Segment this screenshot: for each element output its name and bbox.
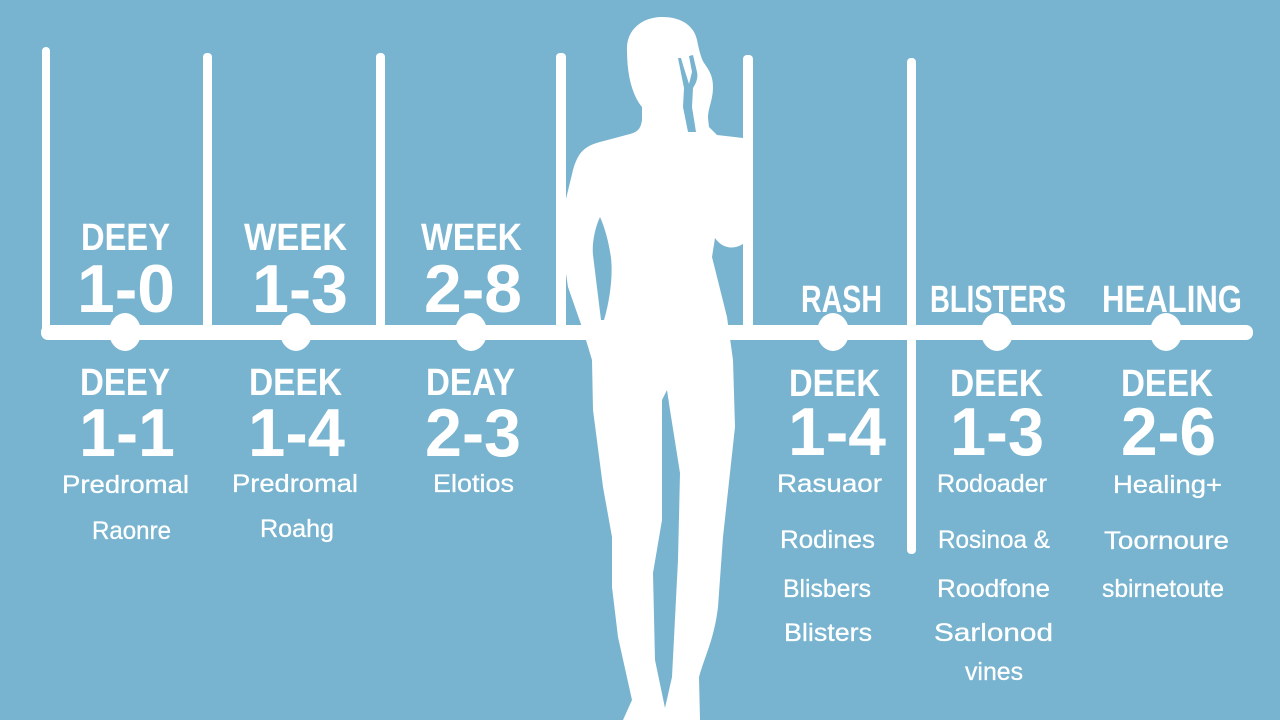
column 5 details: vines [965, 658, 1023, 686]
column 1 details: 1-1 [79, 395, 175, 471]
column 6 details: sbirnetoute [1102, 575, 1224, 603]
human silhouette [563, 17, 753, 720]
column 4 details: DEEK [789, 363, 880, 405]
stage 3 upper label: 2-8 [424, 251, 522, 327]
column 6 details: Toornoure [1104, 527, 1229, 555]
column 6 details: 2-6 [1121, 394, 1216, 470]
column 1 details: Predromal [62, 471, 189, 499]
column 6 details: DEEK [1121, 363, 1213, 405]
stage 2 upper label: 1-3 [252, 251, 348, 327]
column 2 details [232, 362, 358, 543]
column 5 details [934, 363, 1053, 686]
column 1 details: Raonre [92, 517, 171, 545]
stage 1 upper label: DEEY [81, 217, 170, 259]
column 3 details: 2-3 [425, 395, 521, 471]
column 6 details [1102, 363, 1229, 603]
column 4 details: Blisters [784, 619, 872, 647]
column 6 details: Healing+ [1113, 471, 1222, 499]
column 5 details: Rosinoa & [938, 526, 1050, 554]
column 1 details [62, 362, 189, 545]
column 5 details: 1-3 [950, 394, 1044, 470]
column 4 details: 1-4 [788, 394, 886, 470]
column 2 details: DEEK [249, 362, 342, 404]
stage 1 upper label: 1-0 [77, 251, 175, 327]
column 5 details: DEEK [950, 363, 1043, 405]
column 4 details: Rodines [780, 526, 875, 554]
column 5 details: Sarlonod [934, 619, 1053, 647]
stage 3 upper label [421, 217, 522, 327]
column 2 details: 1-4 [248, 395, 345, 471]
column 1 details: DEEY [80, 362, 170, 404]
heading: healing: HEALING [1102, 279, 1242, 321]
stage 1 upper label [77, 217, 175, 327]
heading: rash: RASH [801, 279, 882, 321]
column 3 details [425, 362, 521, 498]
column 5 details: Roodfone [937, 575, 1050, 603]
column 4 details [777, 363, 886, 647]
column 3 details: DEAY [426, 362, 515, 404]
column 2 details: Predromal [232, 470, 358, 498]
column 4 details: Blisbers [783, 575, 871, 603]
column 3 details: Elotios [433, 470, 514, 498]
column 4 details: Rasuaor [777, 470, 882, 498]
timeline with stage dividers and markers [41, 47, 1253, 554]
stage 2 upper label [244, 217, 348, 327]
heading: blisters: BLISTERS [930, 279, 1066, 321]
stage 2 upper label: WEEK [244, 217, 348, 259]
stage 3 upper label: WEEK [421, 217, 522, 259]
column 5 details: Rodoader [937, 470, 1047, 498]
column 2 details: Roahg [260, 515, 334, 543]
